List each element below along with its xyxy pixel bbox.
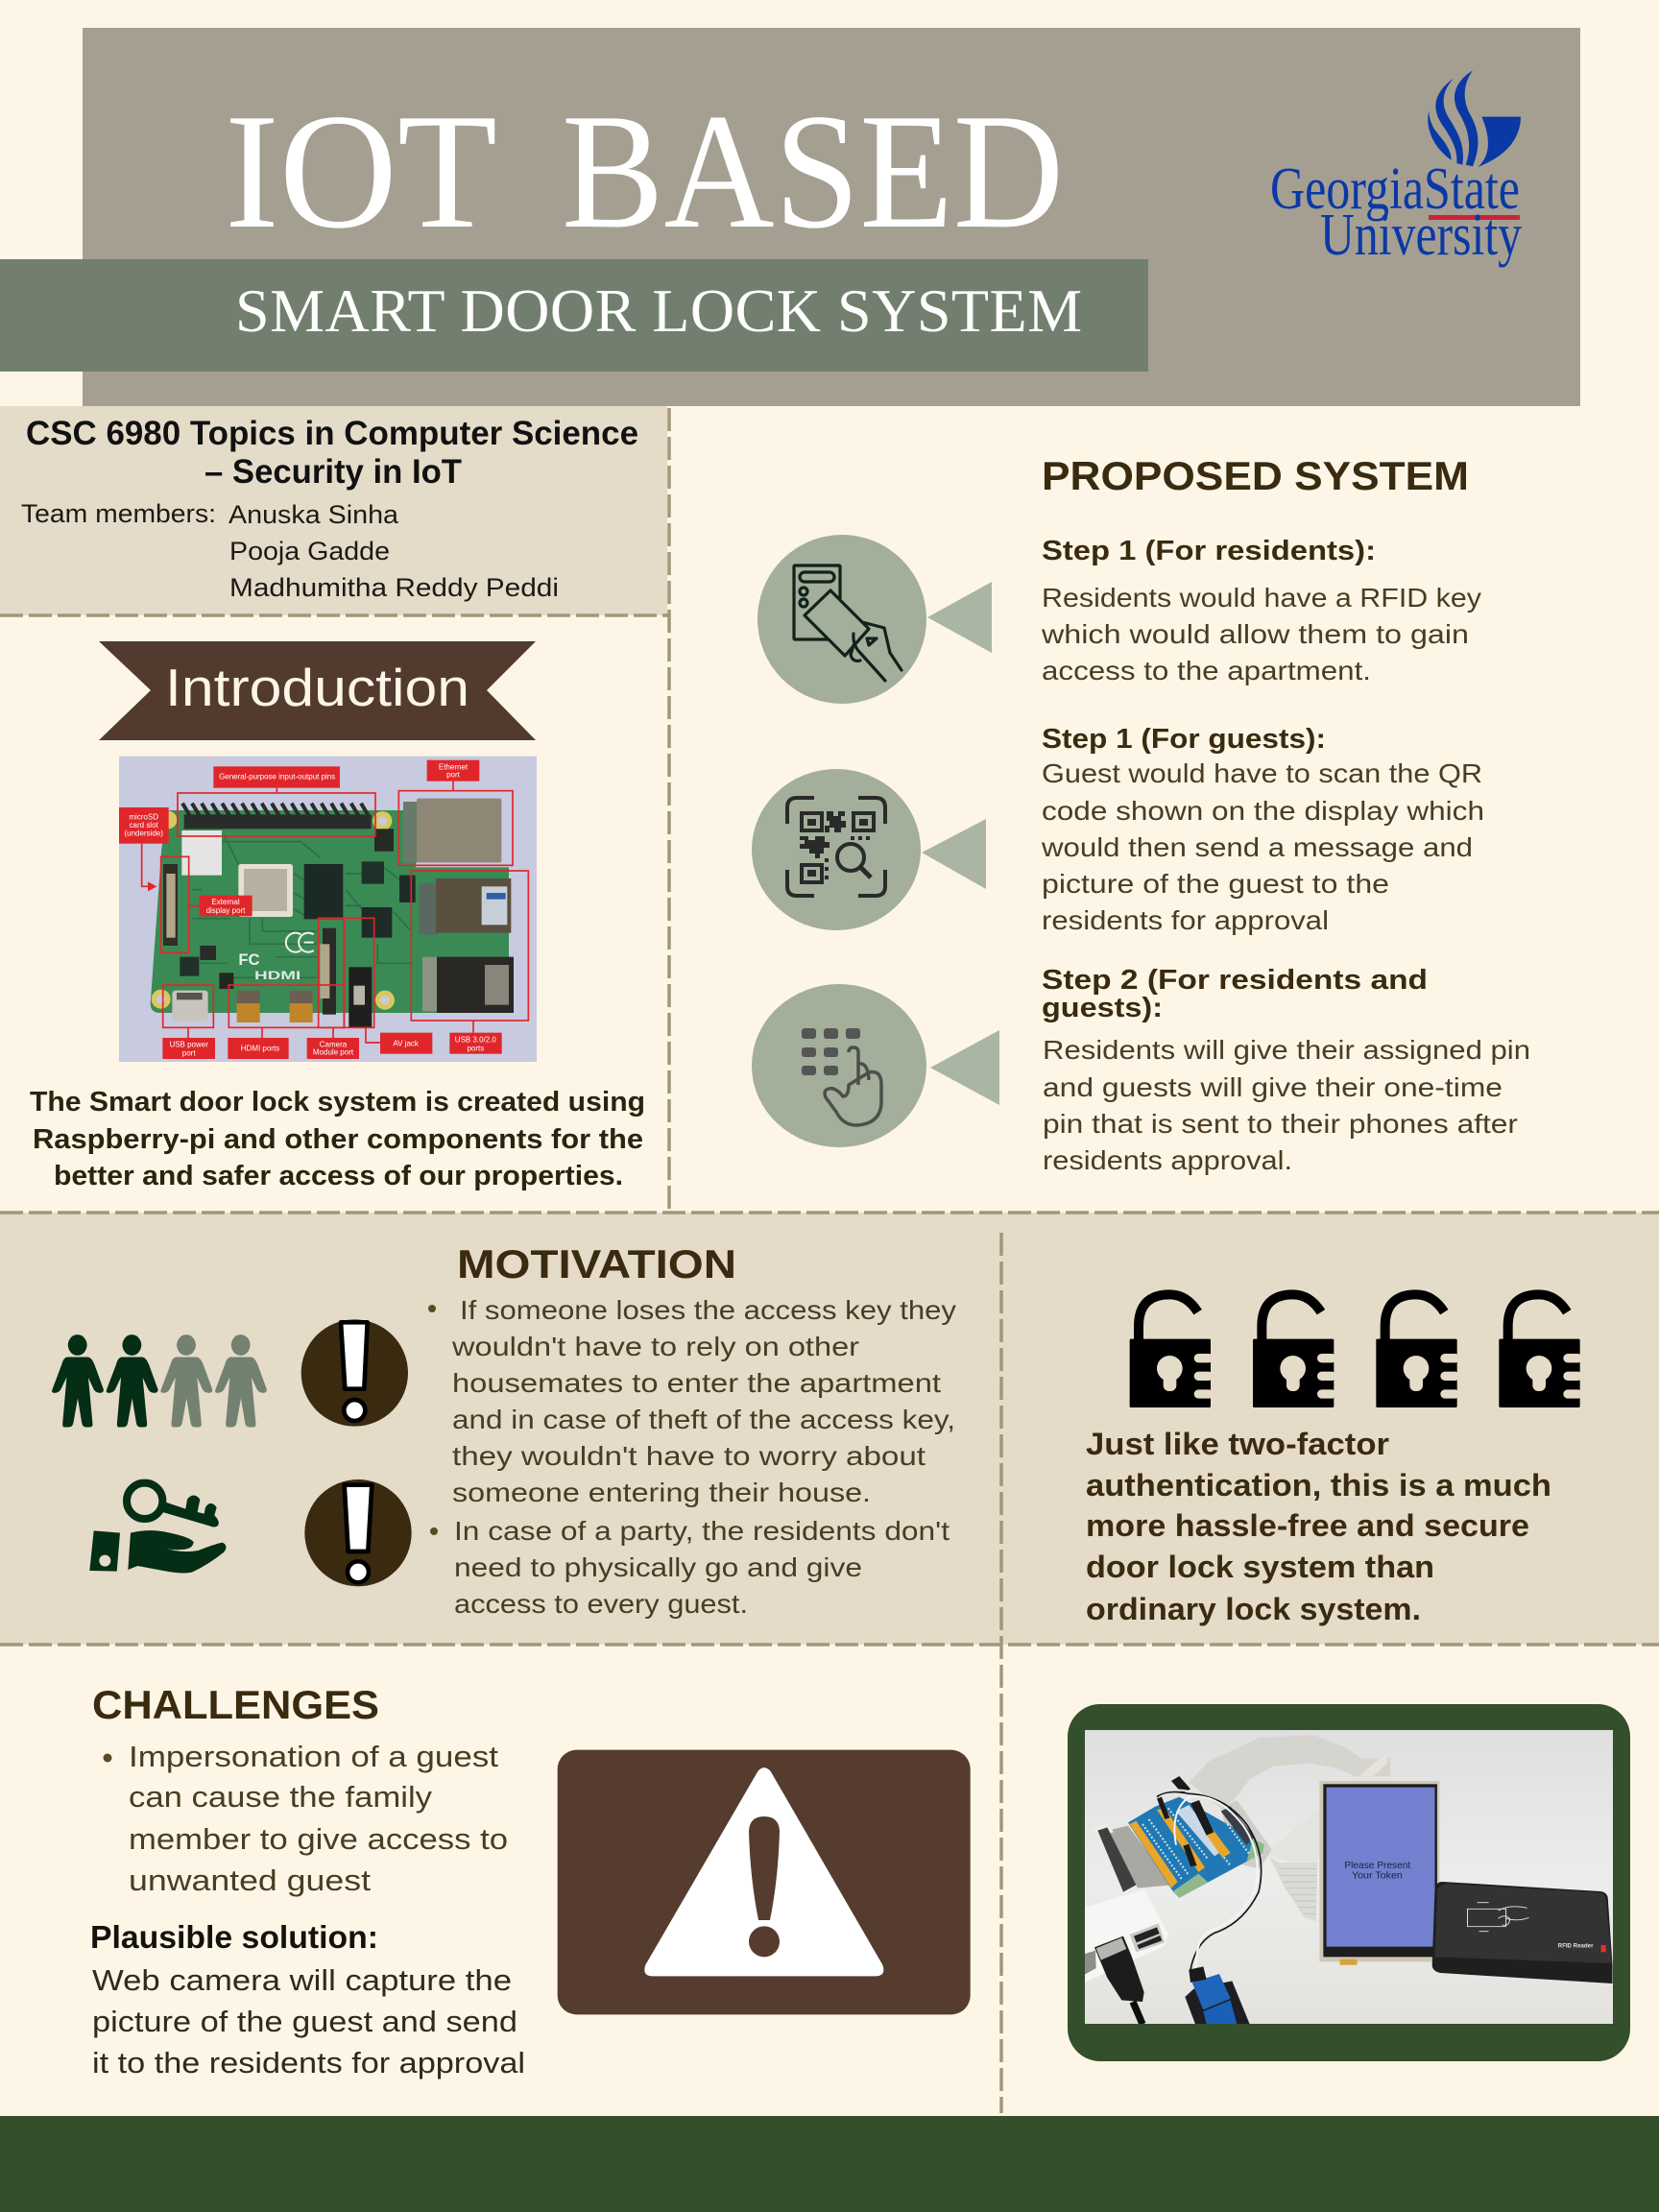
course title <box>26 415 638 491</box>
image: Raspberry Pi board with labels: USB power <box>169 1041 208 1049</box>
arrow <box>922 819 986 889</box>
step 1 residents text: access to the apartment. <box>1042 656 1371 685</box>
breakout board <box>1128 1797 1264 1898</box>
two-factor text: Just like two-factor <box>1086 1427 1389 1461</box>
step 2 text: residents approval. <box>1043 1145 1292 1175</box>
plausible solution: Web camera will capture the <box>92 1963 512 1997</box>
image: Raspberry Pi board with labels: ports <box>467 1045 484 1053</box>
motivation bullets: someone entering their house. <box>452 1478 871 1507</box>
course title: – Security in IoT <box>204 453 462 491</box>
motivation bullets: and in case of theft of the access key, <box>452 1405 955 1434</box>
header panel <box>0 28 1580 406</box>
plausible solution: it to the residents for approval <box>92 2046 525 2080</box>
panel: motivation background <box>0 1213 1659 1645</box>
two-factor text: more hassle-free and secure <box>1086 1508 1529 1543</box>
step 2 text <box>1042 965 1530 1175</box>
step 2 text: Residents will give their assigned pin <box>1043 1035 1530 1065</box>
icon: key in hand <box>89 1483 226 1574</box>
relay module <box>1185 1981 1250 2024</box>
team members <box>21 499 559 602</box>
logo: Georgia State University: University <box>1320 203 1522 268</box>
step 2 text: pin that is sent to their phones after <box>1043 1109 1518 1139</box>
team members: Madhumitha Reddy Peddi <box>229 573 559 602</box>
challenges list: can cause the family <box>129 1780 433 1814</box>
challenges list: Impersonation of a guest <box>129 1740 498 1773</box>
motivation bullets: access to every guest. <box>454 1589 748 1619</box>
subtitle: SMART DOOR LOCK SYSTEM <box>235 276 1082 345</box>
intro paragraph: better and safer access of our properties. <box>54 1161 623 1191</box>
footer band <box>0 2116 1659 2212</box>
step 1 guests text: code shown on the display which <box>1042 796 1484 826</box>
icon: alert 1 <box>301 1319 408 1427</box>
challenges list: member to give access to <box>129 1822 508 1856</box>
panel: course and team <box>0 406 667 615</box>
heading: challenges: CHALLENGES <box>92 1682 379 1727</box>
step 1 residents text: which would allow them to gain <box>1041 619 1469 649</box>
Pi case <box>1085 1889 1168 1983</box>
RFID reader <box>1432 1882 1613 1984</box>
image: Raspberry Pi board with labels: port <box>446 771 461 780</box>
step 1 guests text: Guest would have to scan the QR <box>1042 758 1482 788</box>
connectors <box>163 864 178 946</box>
image: Raspberry Pi board with labels: (underside) <box>124 830 163 838</box>
step 1 residents text: Residents would have a RFID key <box>1042 583 1481 613</box>
motivation bullets: In case of a party, the residents don't <box>454 1516 950 1546</box>
motivation bullets: If someone loses the access key they <box>460 1295 956 1325</box>
icon: RFID card circle <box>757 535 992 704</box>
logo: Georgia State University <box>1270 70 1522 268</box>
display message <box>1345 1861 1411 1878</box>
course title: CSC 6980 Topics in Computer Science <box>26 415 638 452</box>
two-factor text: authentication, this is a much <box>1086 1468 1551 1503</box>
step 2 text: and guests will give their one-time <box>1043 1072 1503 1102</box>
icon: QR code circle <box>752 769 986 930</box>
ethernet <box>403 802 418 862</box>
title <box>225 81 1064 263</box>
display <box>1319 1781 1439 1961</box>
image: Raspberry Pi board with labels: HDMI ports <box>241 1045 279 1053</box>
motivation bullets: they wouldn't have to worry about <box>452 1441 926 1471</box>
two-factor text: ordinary lock system. <box>1086 1592 1421 1626</box>
image: Raspberry Pi board with labels: port <box>182 1049 196 1058</box>
image: Raspberry Pi board with labels: Camera <box>320 1041 348 1049</box>
heading: motivation: MOTIVATION <box>457 1241 736 1286</box>
step 1 guests text: Step 1 (For guests): <box>1042 724 1326 755</box>
photo: prototype hardware <box>1085 1730 1613 2024</box>
image: Raspberry Pi board with labels: FC <box>238 950 260 969</box>
arrow <box>930 1030 999 1105</box>
motivation bullets <box>428 1295 956 1619</box>
image: Raspberry Pi board with labels: microSD <box>129 812 158 821</box>
title: IOT <box>225 81 497 263</box>
motivation bullets: wouldn't have to rely on other <box>451 1332 859 1361</box>
step 1 guests text: residents for approval <box>1042 905 1329 935</box>
left connector cable <box>1107 1826 1171 1888</box>
icon: alert 2 <box>304 1479 412 1586</box>
ribbon cables <box>1189 1735 1390 1808</box>
image: Raspberry Pi board with labels <box>119 757 537 1062</box>
image: Raspberry Pi board with labels: External <box>211 898 240 906</box>
USB plug <box>1094 1936 1144 2002</box>
intro paragraph: Raspberry-pi and other components for the <box>33 1124 643 1155</box>
banner: Introduction: Introduction <box>165 658 469 717</box>
challenges list <box>104 1740 508 1897</box>
two-factor text: door lock system than <box>1086 1550 1434 1584</box>
display message: Your Token <box>1352 1871 1403 1881</box>
step 1 guests text <box>1041 724 1484 935</box>
image: Raspberry Pi board with labels: USB 3.0/2.0 <box>455 1036 496 1045</box>
step 1 guests text: would then send a message and <box>1041 832 1473 862</box>
image: Raspberry Pi board with labels: Ethernet <box>439 763 469 772</box>
display message: Please Present <box>1344 1861 1410 1871</box>
step 1 guests text: picture of the guest to the <box>1042 869 1389 899</box>
banner: Introduction <box>99 641 536 740</box>
image: Raspberry Pi board with labels: HDMI <box>254 969 301 982</box>
red outlines <box>142 781 528 1043</box>
USB <box>420 883 439 934</box>
icon: four people <box>53 1335 266 1427</box>
photo: prototype hardware: RFID Reader <box>1558 1943 1594 1949</box>
GPIO pins <box>184 814 372 829</box>
step 1 residents text: Step 1 (For residents): <box>1042 536 1376 566</box>
plausible solution: picture of the guest and send <box>92 2005 517 2038</box>
team members: Pooja Gadde <box>229 537 390 565</box>
plausible solution: Plausible solution: <box>90 1919 378 1955</box>
image: Raspberry Pi board with labels: card slot <box>130 821 159 830</box>
motivation bullets: housemates to enter the apartment <box>452 1368 941 1398</box>
challenges list: unwanted guest <box>129 1863 371 1897</box>
labels <box>119 760 502 1059</box>
image: Raspberry Pi board with labels: General-purpose input-output pins <box>219 773 335 781</box>
arrow <box>927 582 992 653</box>
step 1 residents text <box>1041 536 1481 685</box>
team members: Team members: <box>21 499 216 528</box>
heading: proposed system: PROPOSED SYSTEM <box>1042 453 1469 498</box>
step 2 text: guests): <box>1042 993 1163 1023</box>
team members: Anuska Sinha <box>228 500 399 529</box>
panel: hardware photo frame <box>1068 1704 1630 2061</box>
two-factor text <box>1086 1427 1551 1626</box>
icon: open padlocks <box>1130 1294 1582 1407</box>
plausible solution <box>90 1919 525 2080</box>
board <box>151 810 509 1013</box>
icon: keypad circle <box>752 984 999 1147</box>
title band <box>0 259 1148 372</box>
image: Raspberry Pi board with labels: Module port <box>313 1048 354 1057</box>
intro paragraph <box>30 1087 645 1191</box>
icon: warning sign <box>558 1750 971 2014</box>
title: BASED <box>562 81 1064 263</box>
motivation bullets: need to physically go and give <box>454 1552 862 1582</box>
step 2 text: Step 2 (For residents and <box>1042 965 1428 996</box>
image: Raspberry Pi board with labels: AV jack <box>393 1039 419 1047</box>
intro paragraph: The Smart door lock system is created using <box>30 1087 645 1118</box>
logo: Georgia State University: GeorgiaState <box>1270 156 1520 222</box>
image: Raspberry Pi board with labels: display port <box>206 906 246 915</box>
jumper wires <box>1157 1791 1262 1970</box>
